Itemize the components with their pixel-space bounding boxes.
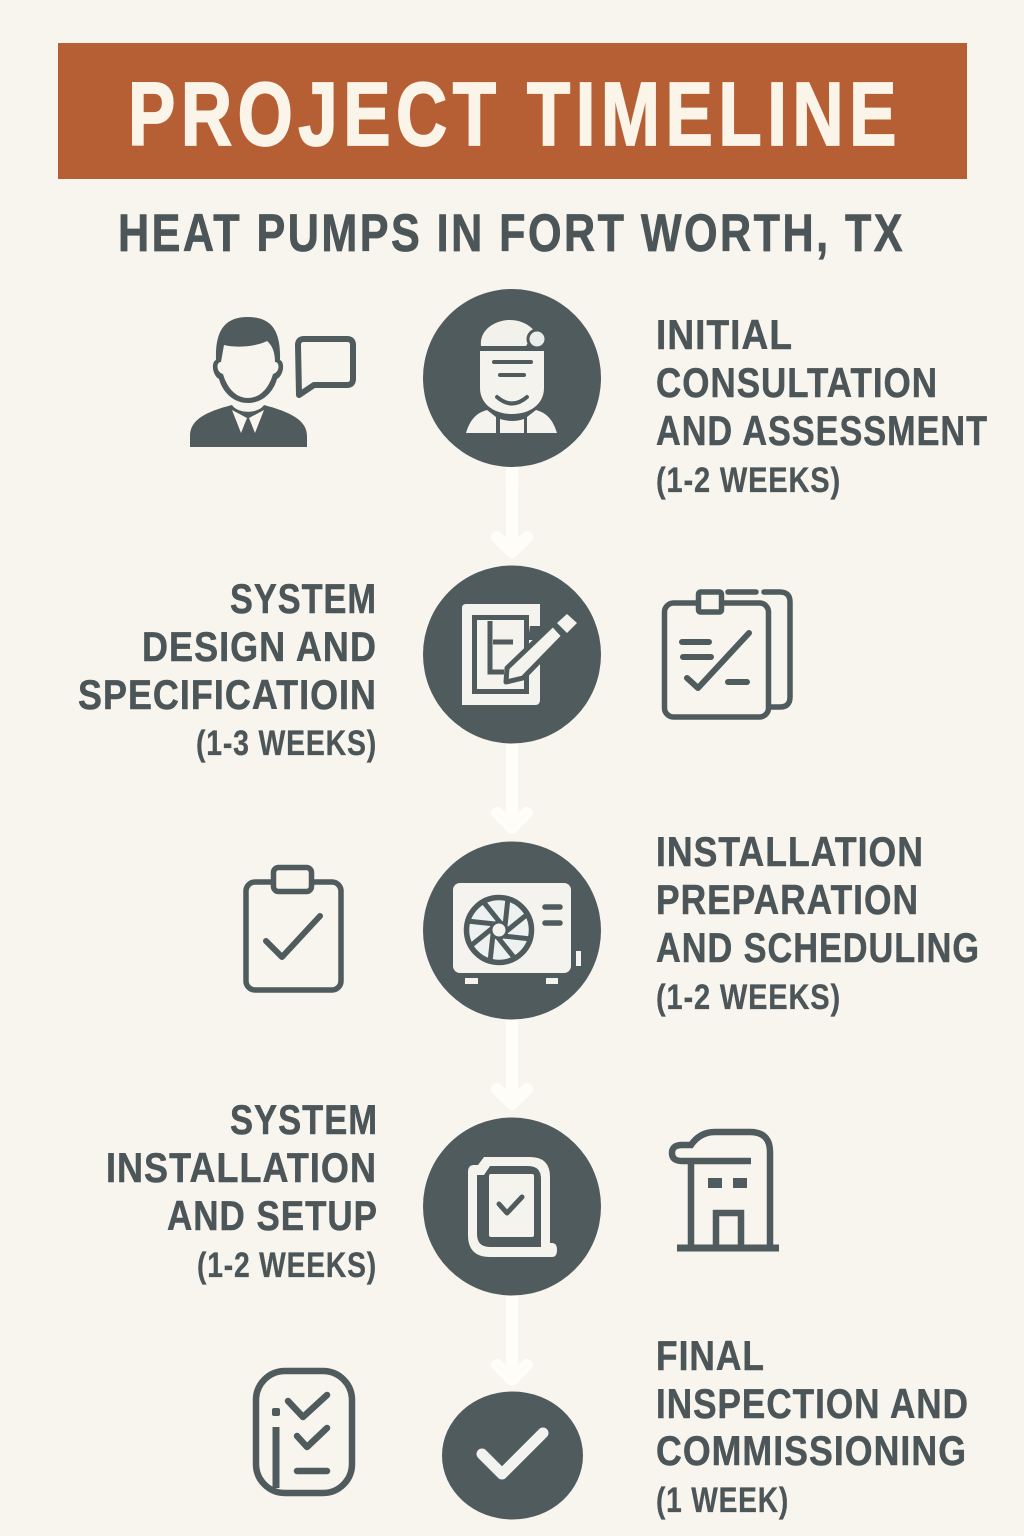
step 1 text: INITIAL — [656, 311, 793, 358]
step 2 text — [78, 575, 377, 763]
step 5 text: INSPECTION AND — [656, 1380, 969, 1427]
arrow: step 2 to 3 — [497, 744, 527, 828]
step 3 text: INSTALLATION — [656, 828, 924, 875]
step 4 text: INSTALLATION — [106, 1144, 377, 1191]
step 3 text — [656, 828, 980, 1017]
icon: checklist — [256, 1371, 352, 1493]
step 4 text: AND SETUP — [167, 1192, 378, 1239]
arrow: step 3 to 4 — [497, 1020, 527, 1104]
step 4 text — [106, 1096, 378, 1285]
step 5 text — [656, 1332, 969, 1520]
step 1 circle: technician icon — [423, 289, 601, 467]
step 1 text — [656, 311, 988, 500]
step 5 circle: check icon — [442, 1392, 583, 1520]
title banner — [58, 43, 967, 179]
step 1 text: (1-2 WEEKS) — [656, 461, 841, 500]
step 3 circle: heat pump outdoor unit icon — [423, 842, 601, 1020]
step 5 text: FINAL — [656, 1332, 765, 1379]
step 3 text: PREPARATION — [656, 876, 919, 923]
step 2 circle: design document and pencil icon — [423, 566, 601, 744]
icon: consultant with speech bubble — [190, 317, 353, 447]
step 4 text: (1-2 WEEKS) — [197, 1246, 377, 1285]
step 5 text: COMMISSIONING — [656, 1427, 967, 1474]
step 3 text: (1-2 WEEKS) — [656, 978, 841, 1017]
step 2 text: (1-3 WEEKS) — [196, 724, 377, 763]
step 5 text: (1 WEEK) — [656, 1481, 789, 1520]
icon: clipboard with check — [246, 868, 341, 990]
step 2 text: DESIGN AND — [142, 623, 377, 670]
step 2 text: SYSTEM — [230, 575, 377, 622]
step 4 circle: document with check icon — [423, 1118, 601, 1296]
arrow: step 4 to 5 — [497, 1296, 527, 1380]
step 1 text: CONSULTATION — [656, 359, 938, 406]
step 2 text: SPECIFICATIOIN — [78, 671, 377, 718]
icon: clipboard with documents — [664, 592, 790, 717]
step 4 text: SYSTEM — [230, 1096, 378, 1143]
icon: building — [672, 1132, 779, 1248]
arrow: step 1 to 2 — [497, 468, 527, 552]
